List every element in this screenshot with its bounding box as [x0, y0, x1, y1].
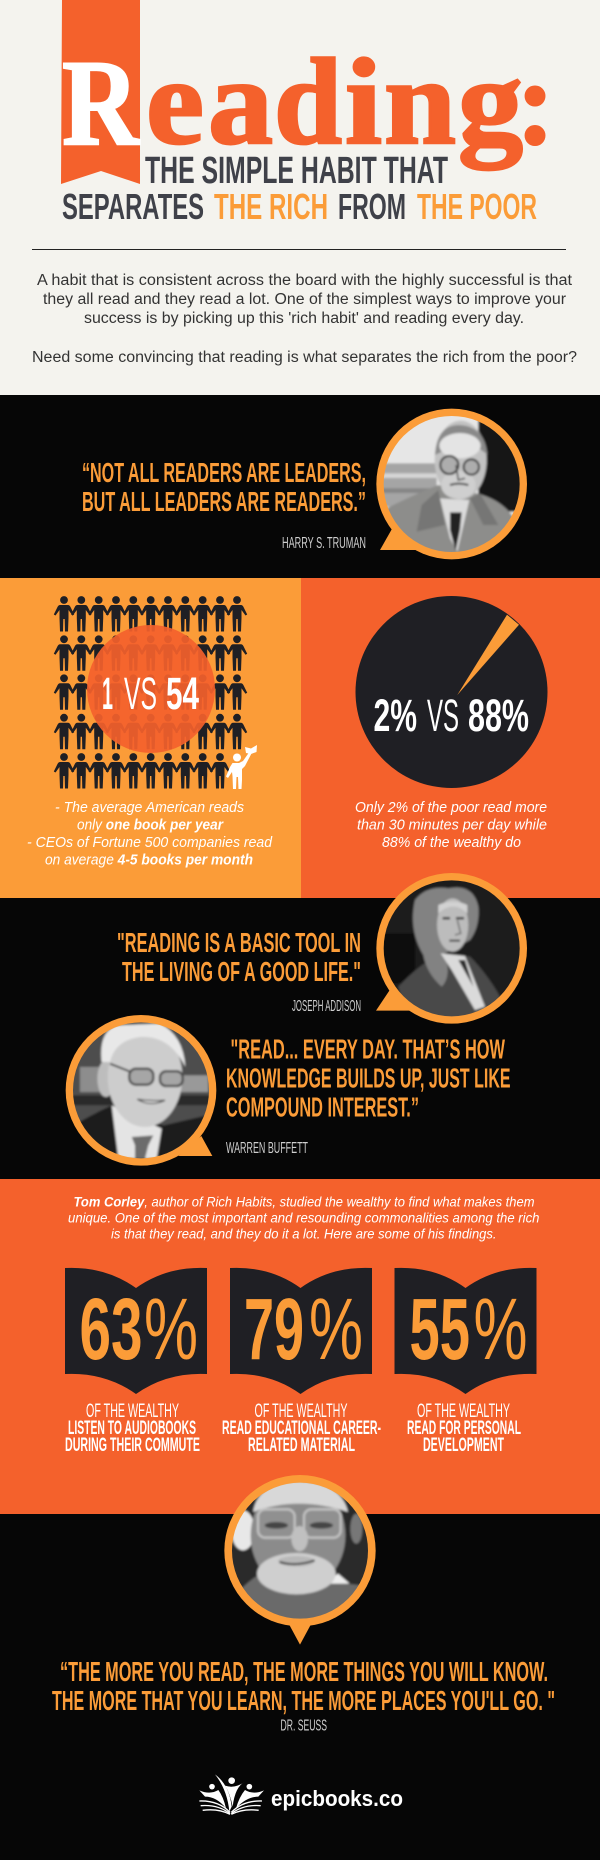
stat: 2% vs 88%: VS — [427, 690, 459, 741]
intro paragraph: Need some convincing that reading is what separates the rich from the poor? — [32, 349, 577, 366]
book stat: 55%: 55 — [410, 1281, 470, 1378]
title: Reading: g — [458, 33, 523, 170]
book stat: 79%: % — [309, 1281, 363, 1378]
book stat: 63%: 63 — [80, 1281, 142, 1378]
intro paragraph — [32, 272, 577, 366]
label: audiobooks: DURING THEIR COMMUTE — [65, 1435, 200, 1456]
panel: Addison and Buffett quotes — [0, 873, 600, 1179]
quote text — [82, 457, 366, 517]
stat: 1 vs 54: VS — [124, 668, 157, 719]
subtitle line two: THE POOR — [417, 186, 537, 227]
quote: Addison: THE LIVING OF A GOOD LIFE." — [122, 956, 361, 987]
caption — [27, 799, 273, 868]
intro text: unique. One of the most important and resounding commonalities among the rich — [68, 1210, 540, 1226]
subtitle line two: SEPARATES — [62, 186, 204, 227]
panel: Tom Corley findings — [0, 1179, 600, 1514]
caption: Only 2% of the poor read more — [355, 799, 547, 816]
quote text: BUT ALL LEADERS ARE READERS.” — [82, 486, 366, 517]
book stat: 79%: 79 — [244, 1281, 304, 1378]
label: audiobooks: OF THE WEALTHY — [86, 1401, 179, 1422]
label: educational material: OF THE WEALTHY — [254, 1401, 348, 1422]
title: Reading: R — [62, 34, 140, 171]
portrait: Dr. Seuss — [224, 1475, 376, 1645]
stat: 2% vs 88% — [374, 690, 529, 741]
attribution: DR. SEUSS — [280, 1718, 327, 1734]
title: Reading: d — [274, 33, 342, 170]
label: audiobooks — [65, 1401, 200, 1456]
subtitle line two: FROM — [338, 186, 406, 227]
caption: 88% of the wealthy do — [382, 834, 521, 851]
label: educational material: RELATED MATERIAL — [248, 1435, 355, 1456]
intro text — [68, 1194, 540, 1242]
caption: than 30 minutes per day while — [357, 816, 547, 834]
label: personal development: DEVELOPMENT — [423, 1435, 504, 1456]
stat: 2% vs 88%: 88% — [468, 690, 529, 741]
panel: Addison and Buffett quotes: JOSEPH ADDISON — [292, 998, 361, 1015]
stat: 1 vs 54: 1 — [102, 668, 113, 719]
stat: 2% vs 88%: 2% — [374, 690, 417, 741]
people pictogram — [54, 596, 247, 788]
intro paragraph: A habit that is consistent across the board with the highly successful is that — [37, 272, 573, 289]
pie chart — [356, 596, 548, 788]
header panel — [0, 0, 600, 395]
logo: epicbooks — [199, 1774, 403, 1814]
title: Reading — [62, 33, 556, 171]
panel: 1 vs 54 — [0, 578, 301, 898]
caption — [355, 799, 547, 851]
book stat: 79% — [230, 1268, 372, 1394]
attribution: WARREN BUFFETT — [226, 1140, 308, 1157]
intro paragraph: success is by picking up this 'rich habit' and reading every day. — [84, 310, 524, 327]
icon: book and readers — [199, 1774, 264, 1814]
quote: Addison: "READING IS A BASIC TOOL IN — [117, 927, 361, 958]
label: personal development: OF THE WEALTHY — [417, 1401, 510, 1422]
wordmark: epicbooks.co — [271, 1786, 403, 1811]
subtitle line one: THE SIMPLE HABIT THAT — [145, 150, 448, 192]
book stat: 63%: % — [144, 1281, 198, 1378]
caption: - CEOs of Fortune 500 companies read — [27, 834, 273, 851]
title: Reading: n — [384, 33, 456, 170]
label: personal development — [407, 1401, 521, 1456]
quote: Buffett — [226, 1034, 510, 1122]
panel: Dr. Seuss quote — [0, 1475, 600, 1860]
title: Reading: a — [208, 33, 273, 170]
portrait: Harry Truman — [376, 409, 527, 559]
attribution: HARRY S. TRUMAN — [282, 535, 366, 552]
panel: 2% vs 88% — [301, 578, 600, 898]
label: educational material — [222, 1401, 381, 1456]
stat: 1 vs 54: 54 — [166, 668, 199, 719]
label: audiobooks: LISTEN TO AUDIOBOOKS — [68, 1418, 196, 1439]
stat: 1 vs 54 — [102, 668, 199, 719]
intro text: is that they read, and they do it a lot. Here are some of his findings. — [111, 1226, 496, 1242]
caption: on average 4-5 books per month — [45, 852, 253, 868]
portrait: Joseph Addison — [376, 873, 527, 1024]
quote: Addison — [117, 927, 361, 987]
orange circle — [87, 625, 215, 753]
icon: reader with book — [226, 745, 257, 789]
subtitle line two — [62, 186, 537, 227]
portrait: Warren Buffett — [66, 1015, 216, 1166]
book stat: 63% — [65, 1268, 207, 1394]
book stat: 55% — [394, 1268, 536, 1394]
title: Reading: i — [345, 33, 382, 170]
caption: only one book per year — [77, 816, 224, 834]
panel: Truman quote — [0, 395, 600, 578]
label: educational material: READ EDUCATIONAL CAREER- — [222, 1418, 381, 1439]
intro text: Tom Corley, author of Rich Habits, studied the wealthy to find what makes them — [74, 1194, 535, 1210]
ribbon bookmark — [61, 0, 140, 184]
quote text — [52, 1656, 555, 1716]
quote text: “NOT ALL READERS ARE LEADERS, — [82, 457, 366, 488]
title: Reading: : — [515, 34, 556, 171]
quote: Buffett: COMPOUND INTEREST.” — [226, 1092, 419, 1122]
intro paragraph: they all read and they read a lot. One of the simplest ways to improve your — [43, 291, 566, 308]
subtitle line two: THE RICH — [214, 186, 328, 227]
title: Reading: e — [146, 33, 204, 170]
book stat: 55%: % — [474, 1281, 528, 1378]
caption: - The average American reads — [55, 799, 244, 816]
